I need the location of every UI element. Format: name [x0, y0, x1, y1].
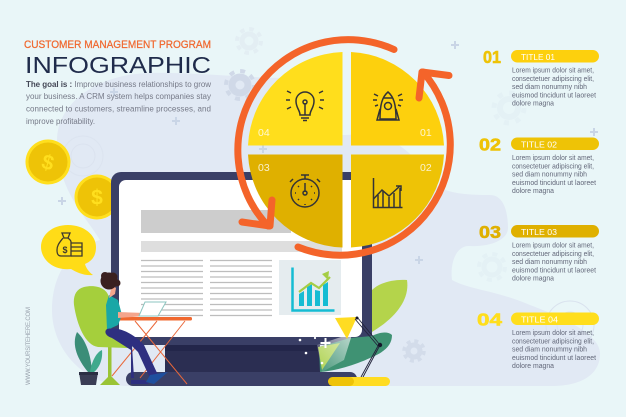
heading: program: CUSTOMER MANAGEMENT PROGRAM	[24, 39, 211, 51]
goal text: The goal is : Improve business relationships to grow	[26, 80, 211, 89]
monitor base	[126, 372, 357, 386]
item 01: dolore magna	[512, 100, 554, 108]
goal text: improve profitability.	[26, 117, 95, 126]
item 01: euismod tincidunt ut laoreet	[512, 92, 596, 100]
item 03	[479, 222, 599, 282]
item 01: Lorem ipsum dolor sit amet,	[512, 68, 594, 74]
monitor frame	[111, 172, 372, 345]
item 04: 04	[477, 310, 502, 330]
person	[100, 272, 168, 384]
coin 1	[26, 140, 70, 184]
stand shadow	[165, 345, 320, 351]
heading: infographic: INFOGRAPHIC	[25, 52, 211, 78]
coin 2	[74, 174, 120, 220]
item 03: dolore magna	[512, 276, 554, 282]
item 04: consectetuer adipiscing elit,	[512, 338, 594, 346]
item 02: 02	[479, 134, 501, 154]
goal text: your business. A CRM system helps companies stay	[26, 92, 211, 101]
item 03: euismod tincidunt ut laoreet	[512, 268, 596, 274]
potted plant	[75, 332, 102, 385]
item 03: consectetuer adipiscing elit,	[512, 251, 594, 258]
icon: growth chart	[374, 178, 402, 208]
monitor	[111, 172, 372, 374]
lamp base	[340, 377, 390, 386]
quadrant numbers: 02	[420, 162, 432, 174]
item 03: TITLE 03	[521, 227, 557, 237]
goal text: connected to customers, streamline processes, and	[26, 104, 211, 114]
goal text	[26, 80, 211, 126]
small light leaf in beam	[318, 343, 340, 370]
item 02: consectetuer adipiscing elit,	[512, 164, 594, 170]
lamp light	[317, 322, 356, 372]
text lines	[141, 260, 272, 316]
desk lamp	[328, 316, 390, 386]
coin 1: $	[39, 150, 57, 176]
item 01: sed diam nonummy nibh	[512, 84, 587, 91]
cycle arrow: top and left	[238, 40, 394, 226]
monitor stand	[165, 340, 320, 374]
coin 2: $	[91, 186, 103, 210]
speech bubble with money icon: $	[62, 245, 68, 255]
icon: light bulb	[286, 91, 324, 120]
quadrant 02	[351, 154, 444, 248]
plus signs	[58, 41, 598, 264]
item 02: sed diam nonummy nibh	[512, 172, 587, 178]
quadrant numbers: 01	[420, 127, 432, 139]
item 01: 01	[483, 47, 501, 67]
item 03: sed diam nonummy nibh	[512, 259, 587, 266]
quadrant numbers: 04	[258, 127, 270, 139]
plant leaf behind monitor	[372, 280, 407, 332]
chair	[74, 286, 133, 385]
speech bubble with money icon	[41, 225, 96, 275]
quadrant numbers	[258, 127, 432, 174]
screen bar chart	[279, 260, 341, 315]
background blob	[52, 73, 600, 386]
item 04: euismod tincidunt ut laoreet	[512, 355, 596, 362]
item 02: Lorem ipsum dolor sit amet,	[512, 155, 594, 162]
item 04: Lorem ipsum dolor sit amet,	[512, 330, 594, 337]
sparkles	[299, 337, 330, 364]
item 03: 03	[479, 222, 501, 242]
quadrant 03	[248, 154, 342, 248]
desk	[112, 317, 192, 384]
item 04: TITLE 04	[521, 314, 558, 324]
lamp glow on screen	[300, 320, 350, 337]
monitor screen	[119, 180, 362, 337]
item 02: dolore magna	[512, 188, 554, 195]
dark leaf	[319, 332, 392, 372]
gray heading bars	[141, 210, 342, 252]
background gears	[63, 29, 594, 361]
cycle arrow: bottom and right	[298, 72, 450, 255]
item 02: TITLE 02	[521, 140, 557, 150]
icon: stopwatch	[290, 175, 320, 207]
item 01: TITLE 01	[521, 52, 555, 62]
item 03: Lorem ipsum dolor sit amet,	[512, 242, 594, 250]
icon: rocket	[373, 92, 403, 120]
item 04	[477, 310, 599, 370]
quadrant 04	[248, 52, 342, 146]
item 04: sed diam nonummy nibh	[512, 346, 587, 354]
laptop	[139, 302, 166, 316]
item 02: euismod tincidunt ut laoreet	[512, 180, 596, 187]
quadrant numbers: 03	[258, 162, 270, 174]
item 01: consectetuer adipiscing elit,	[512, 76, 594, 83]
quadrant 01	[351, 52, 444, 146]
item 01	[483, 47, 599, 108]
item 02	[479, 134, 599, 195]
pie quadrants	[248, 52, 444, 248]
website text: WWW.YOURSITEHERE.COM	[26, 307, 32, 385]
item 04: dolore magna	[512, 363, 554, 370]
